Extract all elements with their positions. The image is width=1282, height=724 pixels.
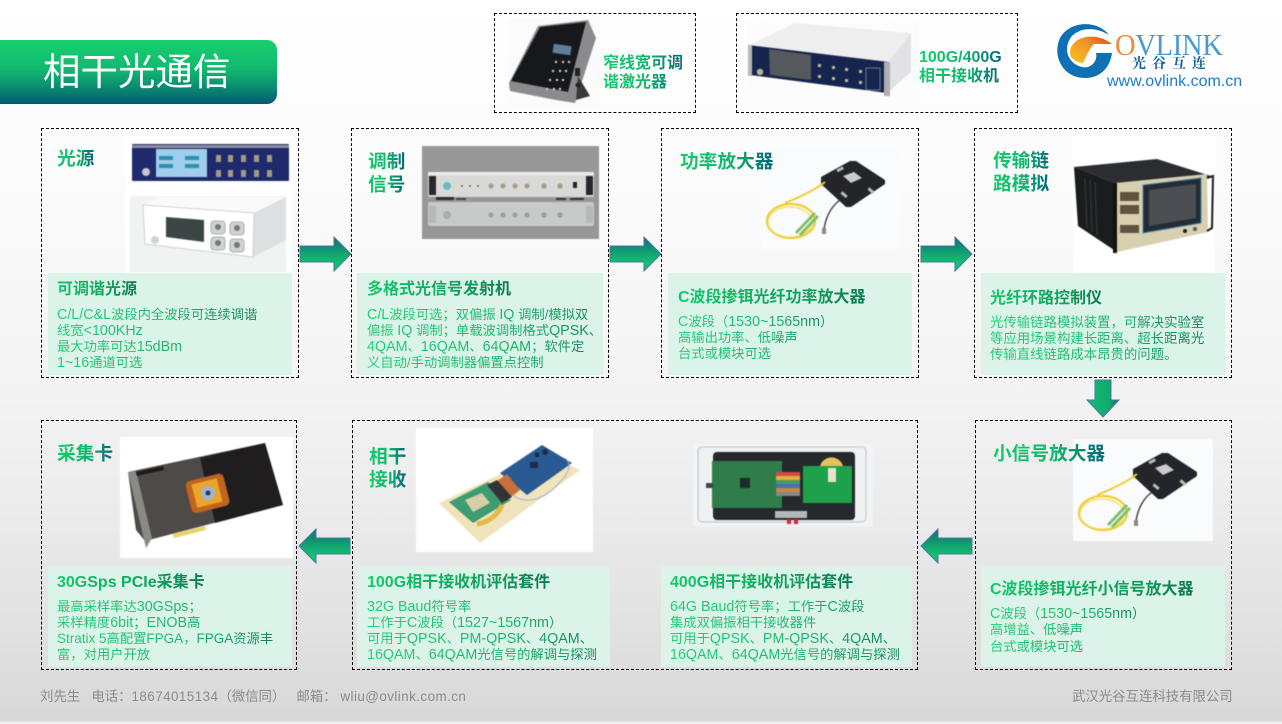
label: 窄线宽可调谐激光器: 窄线宽可调 [603, 55, 683, 72]
info card: 多格式光信号发射机 [357, 273, 603, 375]
product photo: erbium-doped fiber small signal amplifier [1073, 440, 1213, 541]
card heading: 400G相干接收机评估套件 [670, 574, 853, 591]
panel: 调制信号 [351, 128, 609, 378]
product photo: optical signal transmitter [422, 146, 600, 240]
card heading: 光纤环路控制仪 [990, 290, 1102, 307]
heading: 传输链路模拟: 传输链 [993, 150, 1049, 171]
card body [678, 314, 833, 362]
icon: tunable laser device [508, 19, 597, 104]
card body: 富，对用户开放 [57, 647, 150, 662]
arrow: modulation to power amplifier [610, 236, 662, 272]
heading: 光源: 光源 [57, 148, 94, 169]
card body: 光传输链路模拟装置，可解决实验室 [990, 315, 1204, 330]
icon: coherent receiver rack unit [748, 23, 912, 96]
info card: C波段掺铒光纤小信号放大器 [981, 566, 1225, 667]
card body: 传输直线链路成本昂贵的问题。 [990, 347, 1177, 362]
card heading: 100G相干接收机评估套件 [367, 574, 550, 591]
info card: 光纤环路控制仪 [981, 273, 1225, 375]
card body [990, 315, 1204, 364]
heading: 功率放大器: 功率放大器 [680, 151, 773, 172]
label: 窄线宽可调谐激光器: 谐激光器 [603, 74, 667, 91]
heading: 相干接收: 相干 [369, 446, 406, 467]
panel: 采集卡 [41, 420, 297, 670]
card body: 线宽<100KHz [57, 323, 143, 339]
title banner: 相干光通信: 相干光通信 [43, 51, 230, 93]
card body: 采样精度6bit；ENOB高 [57, 615, 200, 631]
heading: 相干接收: 接收 [369, 468, 406, 490]
heading: 调制信号: 信号 [368, 174, 405, 195]
label: 窄线宽可调谐激光器 [603, 54, 683, 92]
card body: 台式或模块可选 [678, 346, 771, 361]
arrow: light source to modulation [300, 236, 352, 272]
card body: 可用于QPSK、PM-QPSK、4QAM、 [367, 631, 593, 647]
card body [670, 599, 900, 663]
label: 100G/400G 相干接收机: 100G/400G [919, 49, 1002, 66]
product photo: erbium-doped fiber power amplifier [765, 160, 886, 240]
card body [990, 606, 1145, 655]
product photo: PCIe acquisition card [120, 437, 293, 558]
product photo: fiber loop controller [1073, 158, 1215, 254]
card heading: 30GSps PCIe采集卡 [57, 574, 205, 591]
info card: 400G相干接收机评估套件 [661, 566, 912, 667]
info card: 100G相干接收机评估套件 [357, 566, 610, 667]
card body: 最高采样率达30GSps； [57, 599, 202, 615]
heading: 调制信号 [368, 150, 405, 196]
heading: 小信号放大器: 小信号放大器 [993, 443, 1105, 464]
card body [57, 307, 257, 371]
arrow: small signal amplifier to coherent reception [920, 528, 972, 564]
card body: 等应用场景构建长距离、超长距离光 [990, 331, 1204, 346]
panel: narrow linewidth tunable laser [494, 13, 696, 113]
card body [367, 307, 602, 371]
arrow: link simulation down to small signal amplifier [1086, 380, 1120, 418]
card heading: 多格式光信号发射机 [367, 281, 511, 298]
card heading: C波段掺铒光纤小信号放大器 [990, 581, 1194, 598]
card body [367, 599, 597, 663]
info card: 30GSps PCIe采集卡 [48, 566, 292, 667]
heading: 传输链路模拟 [993, 149, 1049, 195]
card body: 可用于QPSK、PM-QPSK、4QAM、 [670, 631, 896, 647]
card body: 偏振 IQ 调制；单载波调制格式QPSK、 [367, 323, 602, 339]
footer: company name: 武汉光谷互连科技有限公司 [1072, 689, 1233, 704]
card body: 高输出功率、低噪声 [678, 330, 798, 345]
title banner: 相干光通信 [0, 40, 277, 104]
card body: 义自动/手动调制器偏置点控制 [367, 355, 544, 370]
logo Chinese name: 光谷互连 [1132, 57, 1212, 72]
footer: contact details: 刘先生 电话：18674015134（微信同） 邮箱： wliu@ovlink.com.cn [40, 689, 466, 704]
logo: OVLINK 光谷互连 [1057, 24, 1242, 90]
heading: 调制信号: 调制 [368, 151, 405, 172]
logo website url: www.ovlink.com.cn [1107, 73, 1242, 90]
product photo: 400G receiver evaluation kit [694, 446, 872, 526]
arrow: power amplifier to link simulation [920, 236, 973, 272]
card body: 台式或模块可选 [990, 639, 1083, 654]
label: 100G/400G 相干接收机 [919, 48, 1002, 86]
panel: 相干接收 [352, 420, 918, 670]
card heading: 可调谐光源 [57, 281, 137, 298]
card heading: C波段掺铒光纤功率放大器 [678, 289, 866, 306]
panel: 100G/400G coherent receiver [736, 13, 1018, 113]
card body: 最大功率可达15dBm [57, 339, 182, 355]
product photo: 100G receiver evaluation kit [416, 428, 593, 552]
arrow: coherent reception to acquisition card [298, 528, 350, 564]
card body: 高增益、低噪声 [990, 622, 1083, 637]
heading: 传输链路模拟: 路模拟 [993, 173, 1049, 194]
panel: 光源 [41, 128, 299, 378]
card body [57, 599, 273, 663]
heading: 采集卡: 采集卡 [57, 443, 113, 464]
panel: 传输链路模拟 [974, 128, 1232, 378]
icon: swirl emblem [1057, 24, 1112, 78]
panel: 功率放大器 [661, 128, 919, 378]
info card: 可调谐光源 [48, 273, 292, 375]
logo wordmark: OVLINK [1115, 27, 1223, 62]
card body: 集成双偏振相干接收器件 [670, 615, 816, 630]
label: 100G/400G 相干接收机: 相干接收机 [919, 68, 999, 85]
product photos: tunable light sources [130, 143, 290, 258]
info card: C波段掺铒光纤功率放大器 [668, 273, 912, 375]
heading: 相干接收 [369, 446, 406, 491]
card body: 工作于C波段（1527~1567nm） [367, 615, 562, 631]
panel: 小信号放大器 [975, 420, 1232, 670]
